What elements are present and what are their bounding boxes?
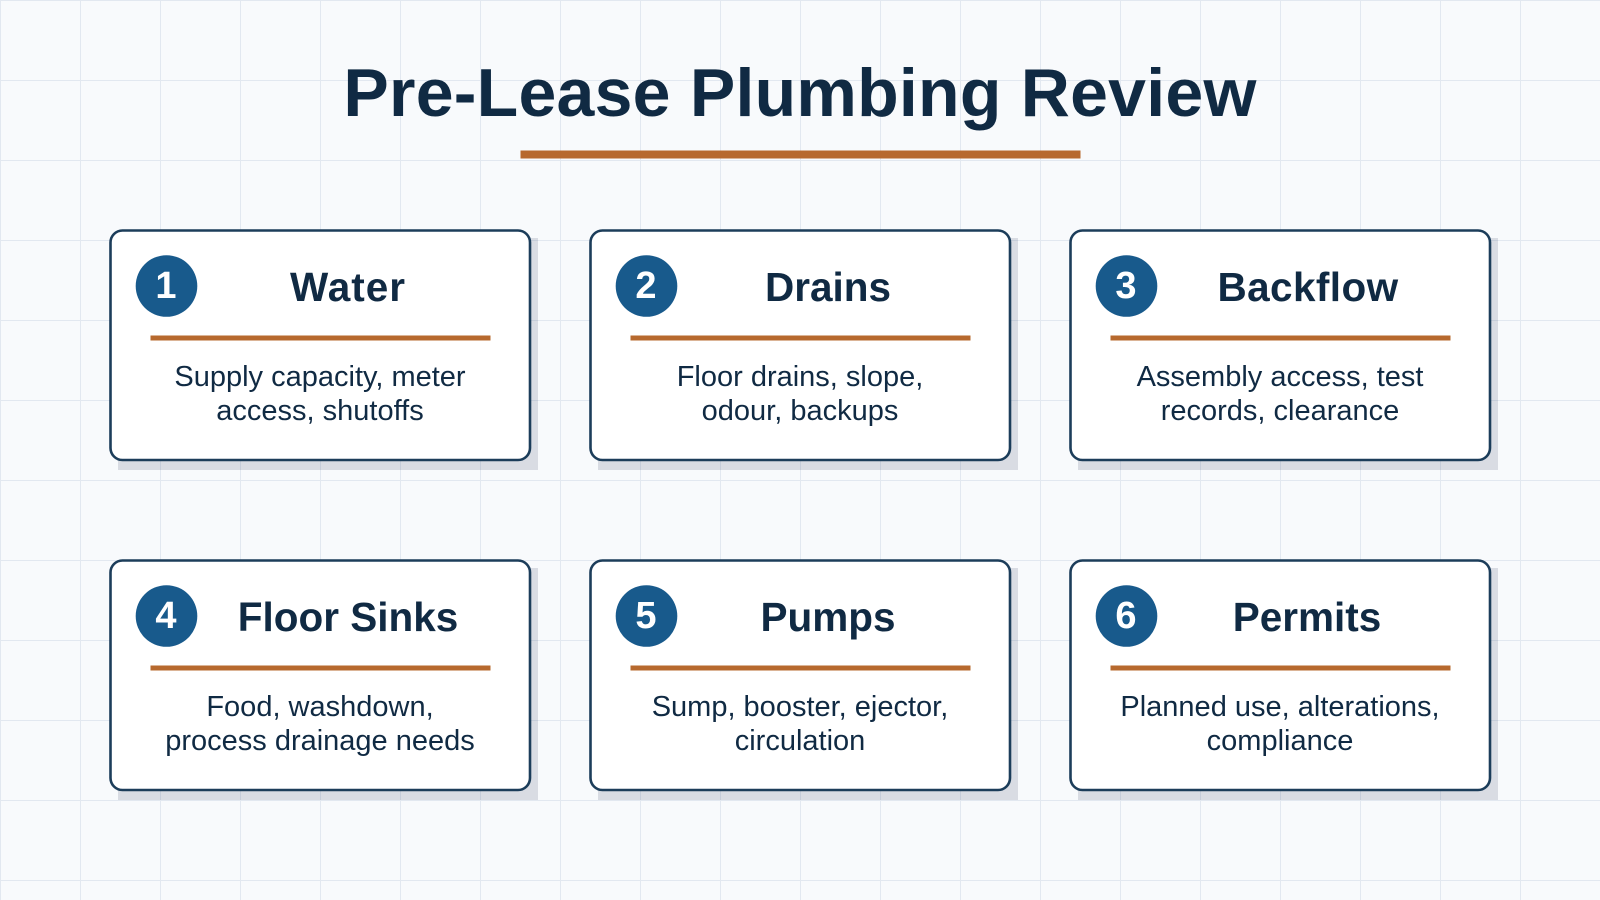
card frame with shadow and accent rule (109, 229, 538, 470)
description: pumps (652, 691, 948, 757)
description: backflow: records, clearance (1161, 395, 1399, 427)
heading: drains: Drains (765, 264, 891, 310)
panel: pumps (589, 559, 1018, 800)
number badge 3: 3 (1115, 265, 1137, 307)
number badge 1: 1 (155, 265, 177, 307)
description: backflow: Assembly access, test (1137, 361, 1423, 393)
description: drains (677, 361, 923, 427)
card frame with shadow and accent rule (109, 559, 538, 800)
number badge 6: 6 (1115, 595, 1137, 637)
title underline (520, 150, 1080, 158)
card frame with shadow and accent rule (589, 229, 1018, 470)
panel: permits (1069, 559, 1498, 800)
description: floor sinks: Food, washdown, (206, 691, 434, 723)
description: floor sinks: process drainage needs (165, 725, 475, 757)
number badge 2 (616, 255, 678, 317)
panel: floor sinks (109, 559, 538, 800)
panel: backflow (1069, 229, 1498, 470)
heading: permits: Permits (1233, 594, 1381, 640)
number badge 5: 5 (635, 595, 657, 637)
card frame with shadow and accent rule (589, 559, 1018, 800)
description: pumps: circulation (735, 725, 865, 757)
number badge 3 (1096, 255, 1158, 317)
description: drains: Floor drains, slope, (677, 361, 923, 393)
description: permits (1120, 691, 1440, 757)
heading: pumps: Pumps (760, 594, 896, 640)
number badge 1 (136, 255, 198, 317)
number badge 4: 4 (155, 595, 177, 637)
heading: floor sinks: Floor Sinks (238, 594, 458, 640)
number badge 5 (616, 585, 678, 647)
heading: water: Water (290, 264, 406, 310)
title: Pre-Lease Plumbing Review (343, 55, 1257, 131)
description: drains: odour, backups (702, 395, 898, 427)
description: permits: compliance (1207, 725, 1353, 757)
card frame with shadow and accent rule (1069, 559, 1498, 800)
description: water: Supply capacity, meter (174, 361, 466, 393)
card frame with shadow and accent rule (1069, 229, 1498, 470)
panel: water (109, 229, 538, 470)
heading: backflow: Backflow (1217, 264, 1398, 310)
description: backflow (1136, 361, 1424, 427)
number badge 2: 2 (635, 265, 657, 307)
panel: drains (589, 229, 1018, 470)
description: floor sinks (165, 691, 475, 757)
description: permits: Planned use, alterations, (1120, 691, 1440, 723)
description: water (174, 361, 466, 427)
description: water: access, shutoffs (216, 395, 424, 427)
number badge 4 (136, 585, 198, 647)
number badge 6 (1096, 585, 1158, 647)
description: pumps: Sump, booster, ejector, (652, 691, 948, 723)
